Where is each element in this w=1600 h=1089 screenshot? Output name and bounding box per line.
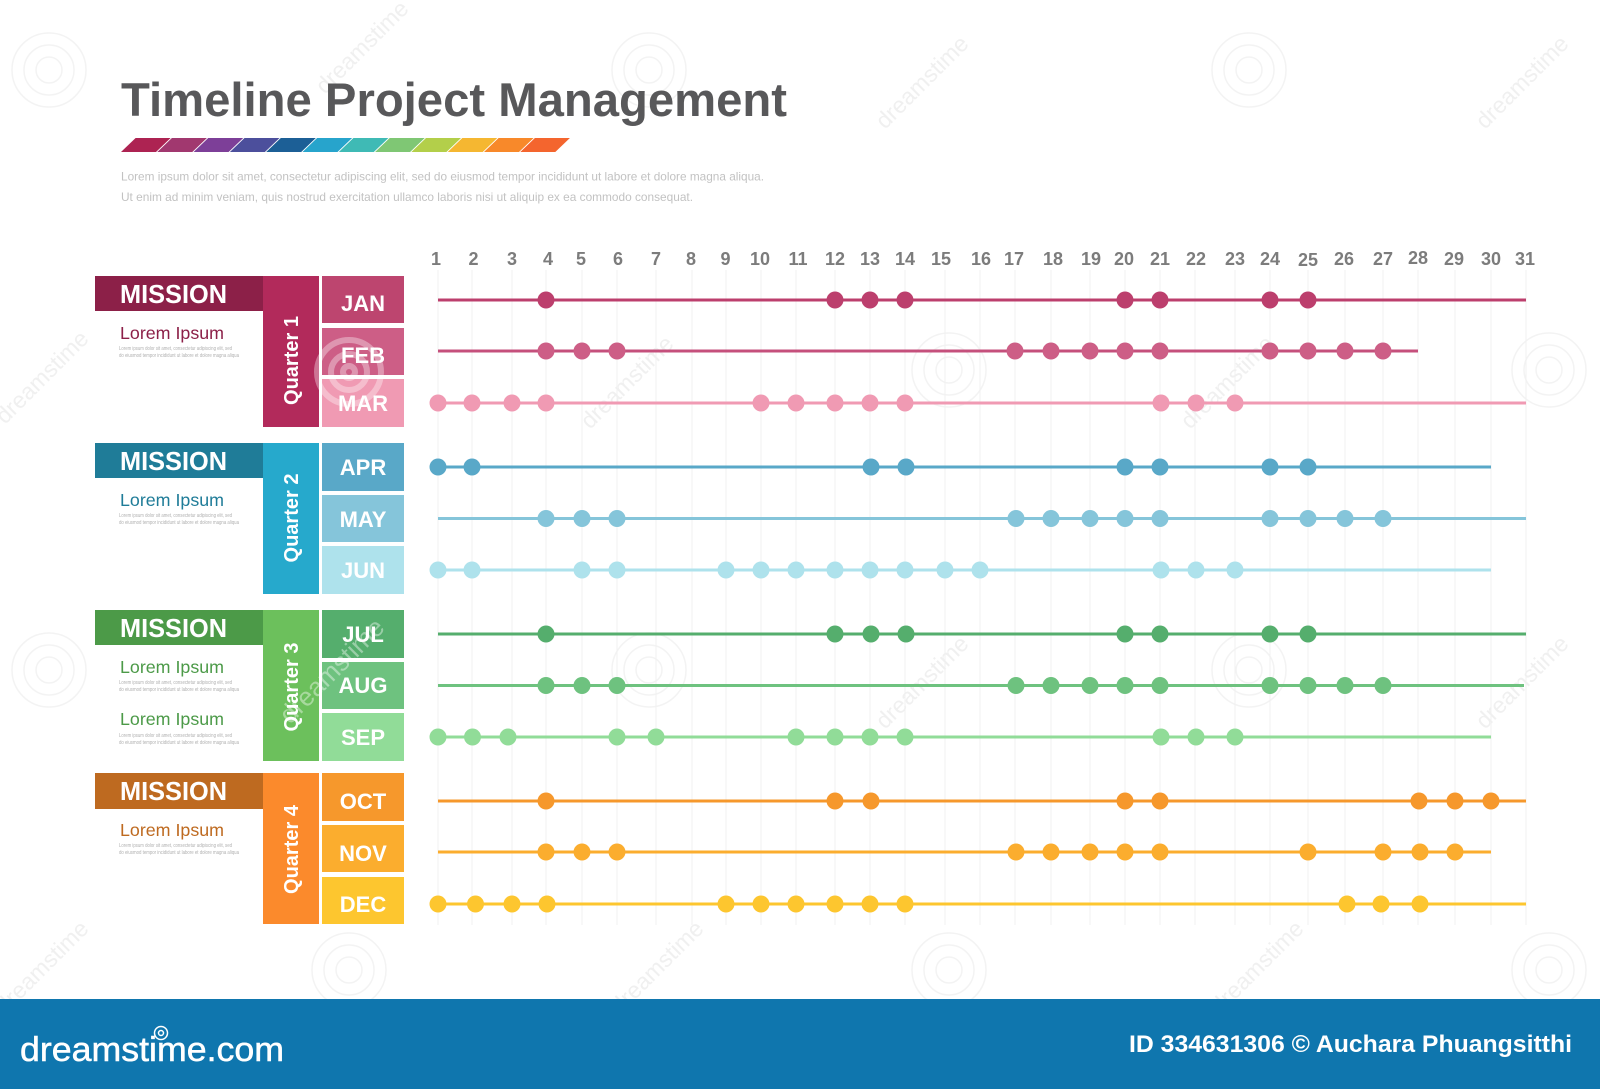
month JUN: JUN [341,558,385,583]
lorem heading Q3 second: Lorem Ipsum [120,709,224,729]
month AUG: AUG [339,673,387,698]
footer credit: ID 334631306 © Auchara Phuangsitthi [1129,1031,1572,1058]
quarter column Q1 [263,276,319,427]
month MAR [322,379,404,427]
day number header: 15 [931,249,951,269]
quarter label Q4: Quarter 4 [281,804,303,894]
watermark background: dreamstime [1470,30,1573,134]
day number header: 24 [1260,249,1280,269]
intro text: Lorem ipsum dolor sit amet, consectetur adipiscing elit, sed do eiusmod tempor incididunt ut labore et dolore magna aliqua. [121,170,764,184]
footer logo text: dreamstime.com [20,1031,284,1069]
timeline row OCT [438,792,1526,810]
panel: quarter 2 [95,443,404,594]
intro text: Ut enim ad minim veniam, quis nostrud exercitation ullamco laboris nisi ut aliquip ex ea commodo consequat. [121,190,693,204]
month AUG [322,662,404,709]
watermark background: dreamstime [575,330,678,434]
day number header: 22 [1186,249,1206,269]
month OCT [322,773,404,821]
day number header: 11 [788,249,808,269]
watermark background: dreamstime [1470,630,1573,734]
watermark spiral over Q1 [317,340,381,404]
title: Timeline Project Management [121,73,787,126]
day number header: 10 [750,249,770,269]
lorem heading Q4: Lorem Ipsum [120,820,224,840]
day number header: 14 [895,249,915,269]
quarter label Q2: Quarter 2 [281,474,303,562]
timeline row JUN [430,562,1491,578]
month MAY [322,495,404,542]
small text Q1: do eiusmod tempor incididunt ut labore et dolore magna aliqua [119,353,239,359]
small text Q3: Lorem ipsum dolor sit amet, consectetur adipiscing elit, sed [119,680,232,686]
small text Q3: do eiusmod tempor incididunt ut labore et dolore magna aliqua [119,687,239,693]
small text Q2: Lorem ipsum dolor sit amet, consectetur adipiscing elit, sed [119,513,232,519]
mission banner Q1 [95,276,263,311]
month APR [322,443,404,491]
month JUL [322,610,404,658]
small text Q2 [119,513,239,526]
month FEB: FEB [341,343,385,368]
mission banner Q3 [95,610,263,645]
small text Q3 [119,680,239,693]
day number header: 8 [686,249,696,269]
lorem heading Q1: Lorem Ipsum [120,323,224,343]
day number header: 23 [1225,249,1245,269]
day number header [431,248,1535,270]
month FEB [322,328,404,375]
day number header: 18 [1043,249,1063,269]
quarter label Q3: Quarter 3 [281,643,303,731]
day number header: 26 [1334,249,1354,269]
day number header: 17 [1004,249,1024,269]
month DEC [322,877,404,924]
panel: quarter 4 [95,773,404,924]
small text Q3 second: do eiusmod tempor incididunt ut labore et dolore magna aliqua [119,740,239,746]
timeline row JUL [438,626,1526,642]
day number header: 9 [720,249,731,269]
lorem heading Q3: Lorem Ipsum [120,657,224,677]
month JUN [322,546,404,594]
quarter label Q1: Quarter 1 [281,316,303,405]
watermark background: dreamstime [605,915,708,1019]
day number header: 12 [825,249,845,269]
mission heading Q2: MISSION [120,446,227,476]
small text Q2: do eiusmod tempor incididunt ut labore et dolore magna aliqua [119,520,239,526]
panel: quarter 1 [95,276,404,427]
watermark background: dreamstime [1175,330,1278,434]
month NOV [322,825,404,872]
day number header: 6 [613,249,623,269]
rainbow stripe bar [121,138,570,152]
day number header: 31 [1515,249,1535,269]
mission heading Q3: MISSION [120,613,227,643]
mission banner Q4 [95,773,263,809]
timeline row MAR [430,394,1526,412]
day number header: 29 [1444,249,1464,269]
watermark background: dreamstime [870,30,973,134]
timeline row JAN [438,292,1526,308]
mission banner Q2 [95,443,263,478]
day number header: 19 [1081,249,1101,269]
day number header: 3 [507,249,517,269]
mission heading Q1: MISSION [120,279,227,309]
footer bar [0,999,1600,1089]
timeline row DEC [430,896,1526,912]
month MAR: MAR [338,391,388,416]
month SEP [322,713,404,761]
day number header: 20 [1114,249,1134,269]
small text Q1: Lorem ipsum dolor sit amet, consectetur adipiscing elit, sed [119,346,232,352]
intro text [121,170,764,204]
month SEP: SEP [341,725,385,750]
lorem heading Q2: Lorem Ipsum [120,490,224,510]
day number header: 7 [651,249,661,269]
day grid lines [438,270,1526,925]
month JAN: JAN [341,291,385,316]
day number header: 28 [1408,248,1428,268]
watermark background: dreamstime [870,630,973,734]
day number header: 1 [431,249,441,269]
small text Q3 second [119,733,239,746]
small text Q3 second: Lorem ipsum dolor sit amet, consectetur adipiscing elit, sed [119,733,232,739]
day number header: 13 [860,249,880,269]
day number header: 30 [1481,249,1501,269]
small text Q1 [119,346,239,359]
timeline row SEP [430,728,1491,746]
quarter column Q4 [263,773,319,924]
timeline row AUG [438,677,1524,694]
day number header: 16 [971,249,991,269]
small text Q4: do eiusmod tempor incididunt ut labore et dolore magna aliqua [119,850,239,856]
icon: logo spiral [154,1026,168,1040]
month JUL: JUL [342,622,384,647]
quarter column Q3 [263,610,319,761]
month DEC: DEC [340,892,386,917]
timeline row APR [430,458,1491,476]
day number header: 4 [543,249,553,269]
day number header: 21 [1150,249,1170,269]
quarter column Q2 [263,443,319,594]
month JAN [322,276,404,323]
timeline row MAY [438,510,1526,527]
small text Q4 [119,843,239,856]
month MAY: MAY [340,507,387,532]
timeline row NOV [438,844,1491,860]
month OCT: OCT [340,789,387,814]
watermark text over Q3: dreamstime [273,612,390,729]
month APR: APR [340,455,386,480]
month NOV: NOV [339,841,387,866]
watermark background: dreamstime [1205,915,1308,1019]
day number header: 25 [1298,250,1318,270]
day number header: 5 [576,249,586,269]
day number header: 2 [468,249,479,269]
timeline row FEB [438,342,1418,360]
panel: quarter 3 [95,610,404,761]
day number header: 27 [1373,249,1393,269]
small text Q4: Lorem ipsum dolor sit amet, consectetur adipiscing elit, sed [119,843,232,849]
mission heading Q4: MISSION [120,776,227,806]
